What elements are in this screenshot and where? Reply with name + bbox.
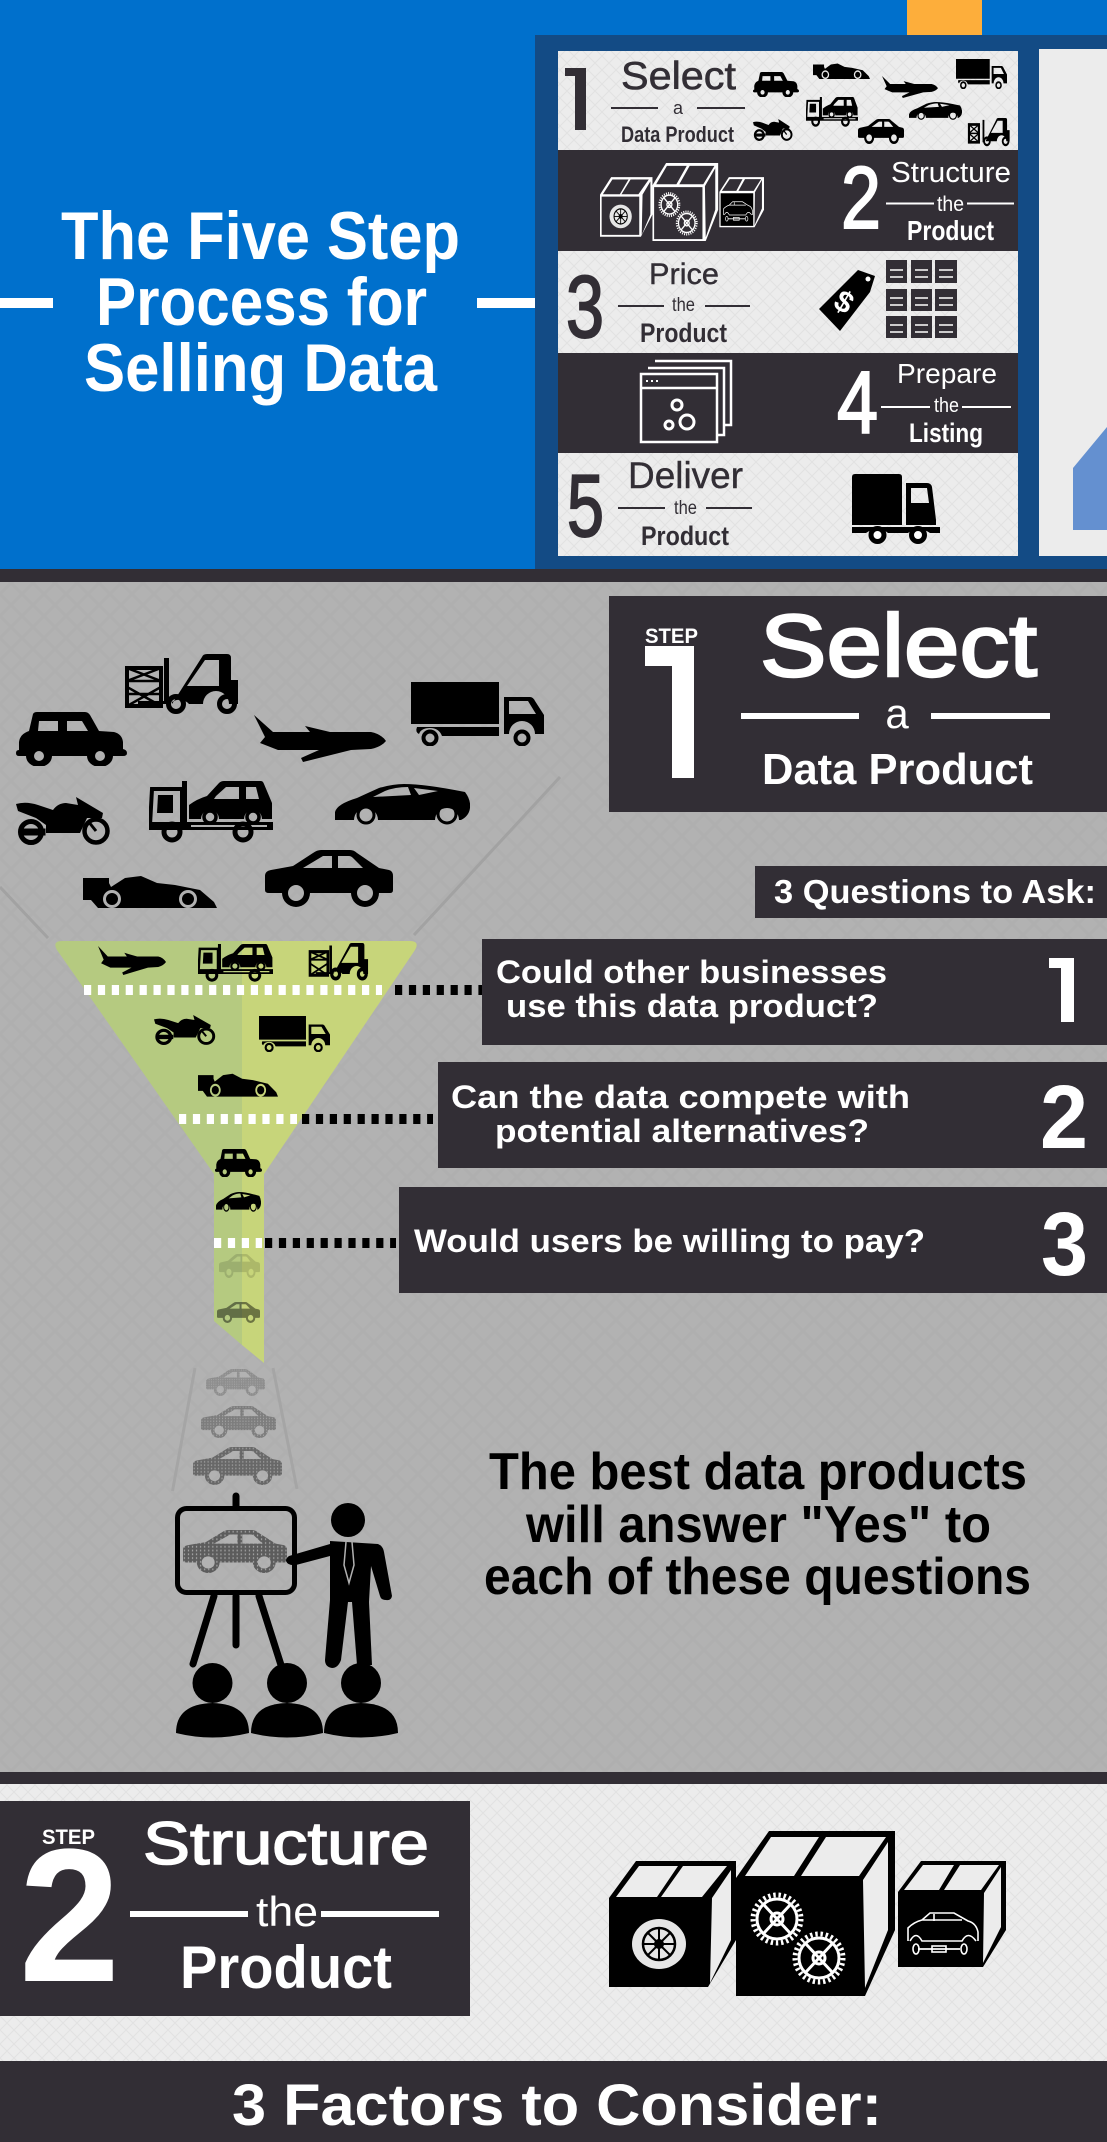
icon: truck (411, 682, 544, 744)
number 1 large (645, 646, 694, 778)
question 1 (482, 939, 1107, 1045)
number 1: 1 (1037, 940, 1088, 1042)
step 1 heading: STEP (645, 625, 698, 648)
panel: five steps overview (556, 50, 1018, 556)
icons: vehicles in funnel (98, 943, 368, 1323)
row 1: select: Data Product (621, 122, 735, 147)
icon: presentation easel (178, 1496, 294, 1665)
white side panel (1039, 49, 1107, 556)
row 4: prepare (558, 353, 1018, 453)
label: 3 questions to ask (755, 866, 1107, 918)
row 5: deliver: Product (641, 521, 729, 551)
icon: race car (83, 876, 217, 908)
title: Process for (96, 264, 427, 340)
step 2 heading: the (256, 1888, 318, 1935)
filter 2 dotted line (179, 1114, 433, 1124)
icon: plane (254, 715, 386, 762)
funnel guide lines (0, 777, 560, 938)
panel: step 2 background (0, 1784, 1107, 2061)
question 1: use this data product? (506, 988, 878, 1024)
row 4: prepare: Prepare (897, 358, 997, 389)
panel: step 1 background (0, 569, 1107, 1784)
row 3: price: Price (649, 258, 719, 291)
icon: audience (176, 1663, 398, 1738)
icon: forklift (127, 654, 238, 712)
blue shape on side panel (1073, 427, 1107, 530)
question 2: Can the data compete with (451, 1079, 910, 1115)
icon: sedan (265, 850, 393, 907)
row 2: structure: Product (907, 215, 994, 246)
question 2 (438, 1062, 1107, 1168)
funnel (55, 941, 417, 1363)
icons: loose vehicles (16, 654, 544, 908)
row 5: deliver: Deliver (628, 455, 743, 496)
number 1: 1 (556, 50, 605, 149)
question 2: 2 (1040, 1068, 1088, 1168)
panel: blue title banner (0, 0, 1107, 569)
title dash right (477, 298, 535, 308)
row 5: deliver: 5 (567, 456, 604, 555)
orange tab (907, 0, 982, 35)
data car projection (172, 1368, 297, 1491)
question 2: potential alternatives? (495, 1113, 869, 1149)
title: Selling Data (84, 330, 438, 406)
row 3: price (558, 251, 1018, 356)
row 5: deliver (558, 453, 1018, 556)
question 3 (399, 1187, 1107, 1295)
row 2: structure (558, 148, 1018, 251)
navy frame (535, 35, 1107, 569)
callout text: best data products: The best data products (489, 1443, 1027, 1501)
row 1: select (556, 50, 1018, 150)
step 1 heading: Data Product (762, 745, 1033, 794)
icon: hatchback (16, 712, 127, 767)
title: The Five Step (61, 198, 460, 274)
step 1 heading (609, 596, 1107, 819)
row 4: prepare: 4 (837, 353, 878, 452)
filter 3 dotted line (214, 1238, 396, 1248)
number 1 (1049, 958, 1074, 1022)
icon: sports car (335, 784, 470, 823)
step 2 heading (0, 1801, 470, 2022)
icon: price grid (886, 260, 957, 338)
question 1: Could other businesses (496, 954, 887, 990)
icon: delivery truck (852, 474, 940, 542)
number 1 (565, 68, 586, 130)
row 4: prepare: the (934, 395, 959, 417)
icon: price tag: $ (828, 284, 859, 321)
step 2 heading: STEP (42, 1826, 95, 1849)
question 3: 3 (1041, 1195, 1088, 1295)
row 1: select: Select (621, 55, 736, 98)
row 5: deliver: the (674, 498, 697, 519)
row 3: price: the (672, 295, 695, 316)
row 3: price: Product (640, 318, 727, 348)
row 2: structure: the (937, 193, 964, 216)
icon: document stack (641, 361, 731, 442)
icon: presenter (286, 1503, 392, 1668)
row 3: price: 3 (566, 257, 604, 356)
callout text: best data products (484, 1443, 1031, 1606)
number 1 large: 1 (620, 607, 726, 819)
row 2: structure: Structure (891, 157, 1011, 189)
icon: motorcycle (16, 797, 108, 842)
filter 1 dotted line (84, 985, 482, 995)
icon: tow truck (149, 781, 273, 840)
title dash left (0, 298, 53, 308)
icon: boxes outlined (600, 163, 764, 241)
row 2: structure: 2 (841, 148, 881, 247)
banner: 3 factors to consider (0, 2061, 1107, 2142)
callout text: best data products: will answer "Yes" to (525, 1496, 991, 1554)
row 4: prepare: Listing (909, 418, 983, 448)
label: 3 questions to ask: 3 Questions to Ask: (774, 873, 1096, 910)
question 3: Would users be willing to pay? (414, 1223, 925, 1259)
icon: price tag (819, 270, 875, 331)
step 2 heading: Product (180, 1934, 392, 2001)
step 2 heading: Structure (143, 1810, 429, 1877)
callout text: best data products: each of these questions (484, 1548, 1031, 1606)
step 2 heading: 2 (19, 1810, 120, 2022)
step 1 heading: a (885, 690, 909, 737)
title (61, 198, 460, 406)
step 1 heading: Select (760, 596, 1037, 695)
icon: three boxes (609, 1831, 1006, 1996)
banner: 3 factors to consider: 3 Factors to Consider: (232, 2073, 882, 2138)
icons: vehicles small (753, 59, 1010, 145)
row 1: select: a (673, 98, 684, 118)
